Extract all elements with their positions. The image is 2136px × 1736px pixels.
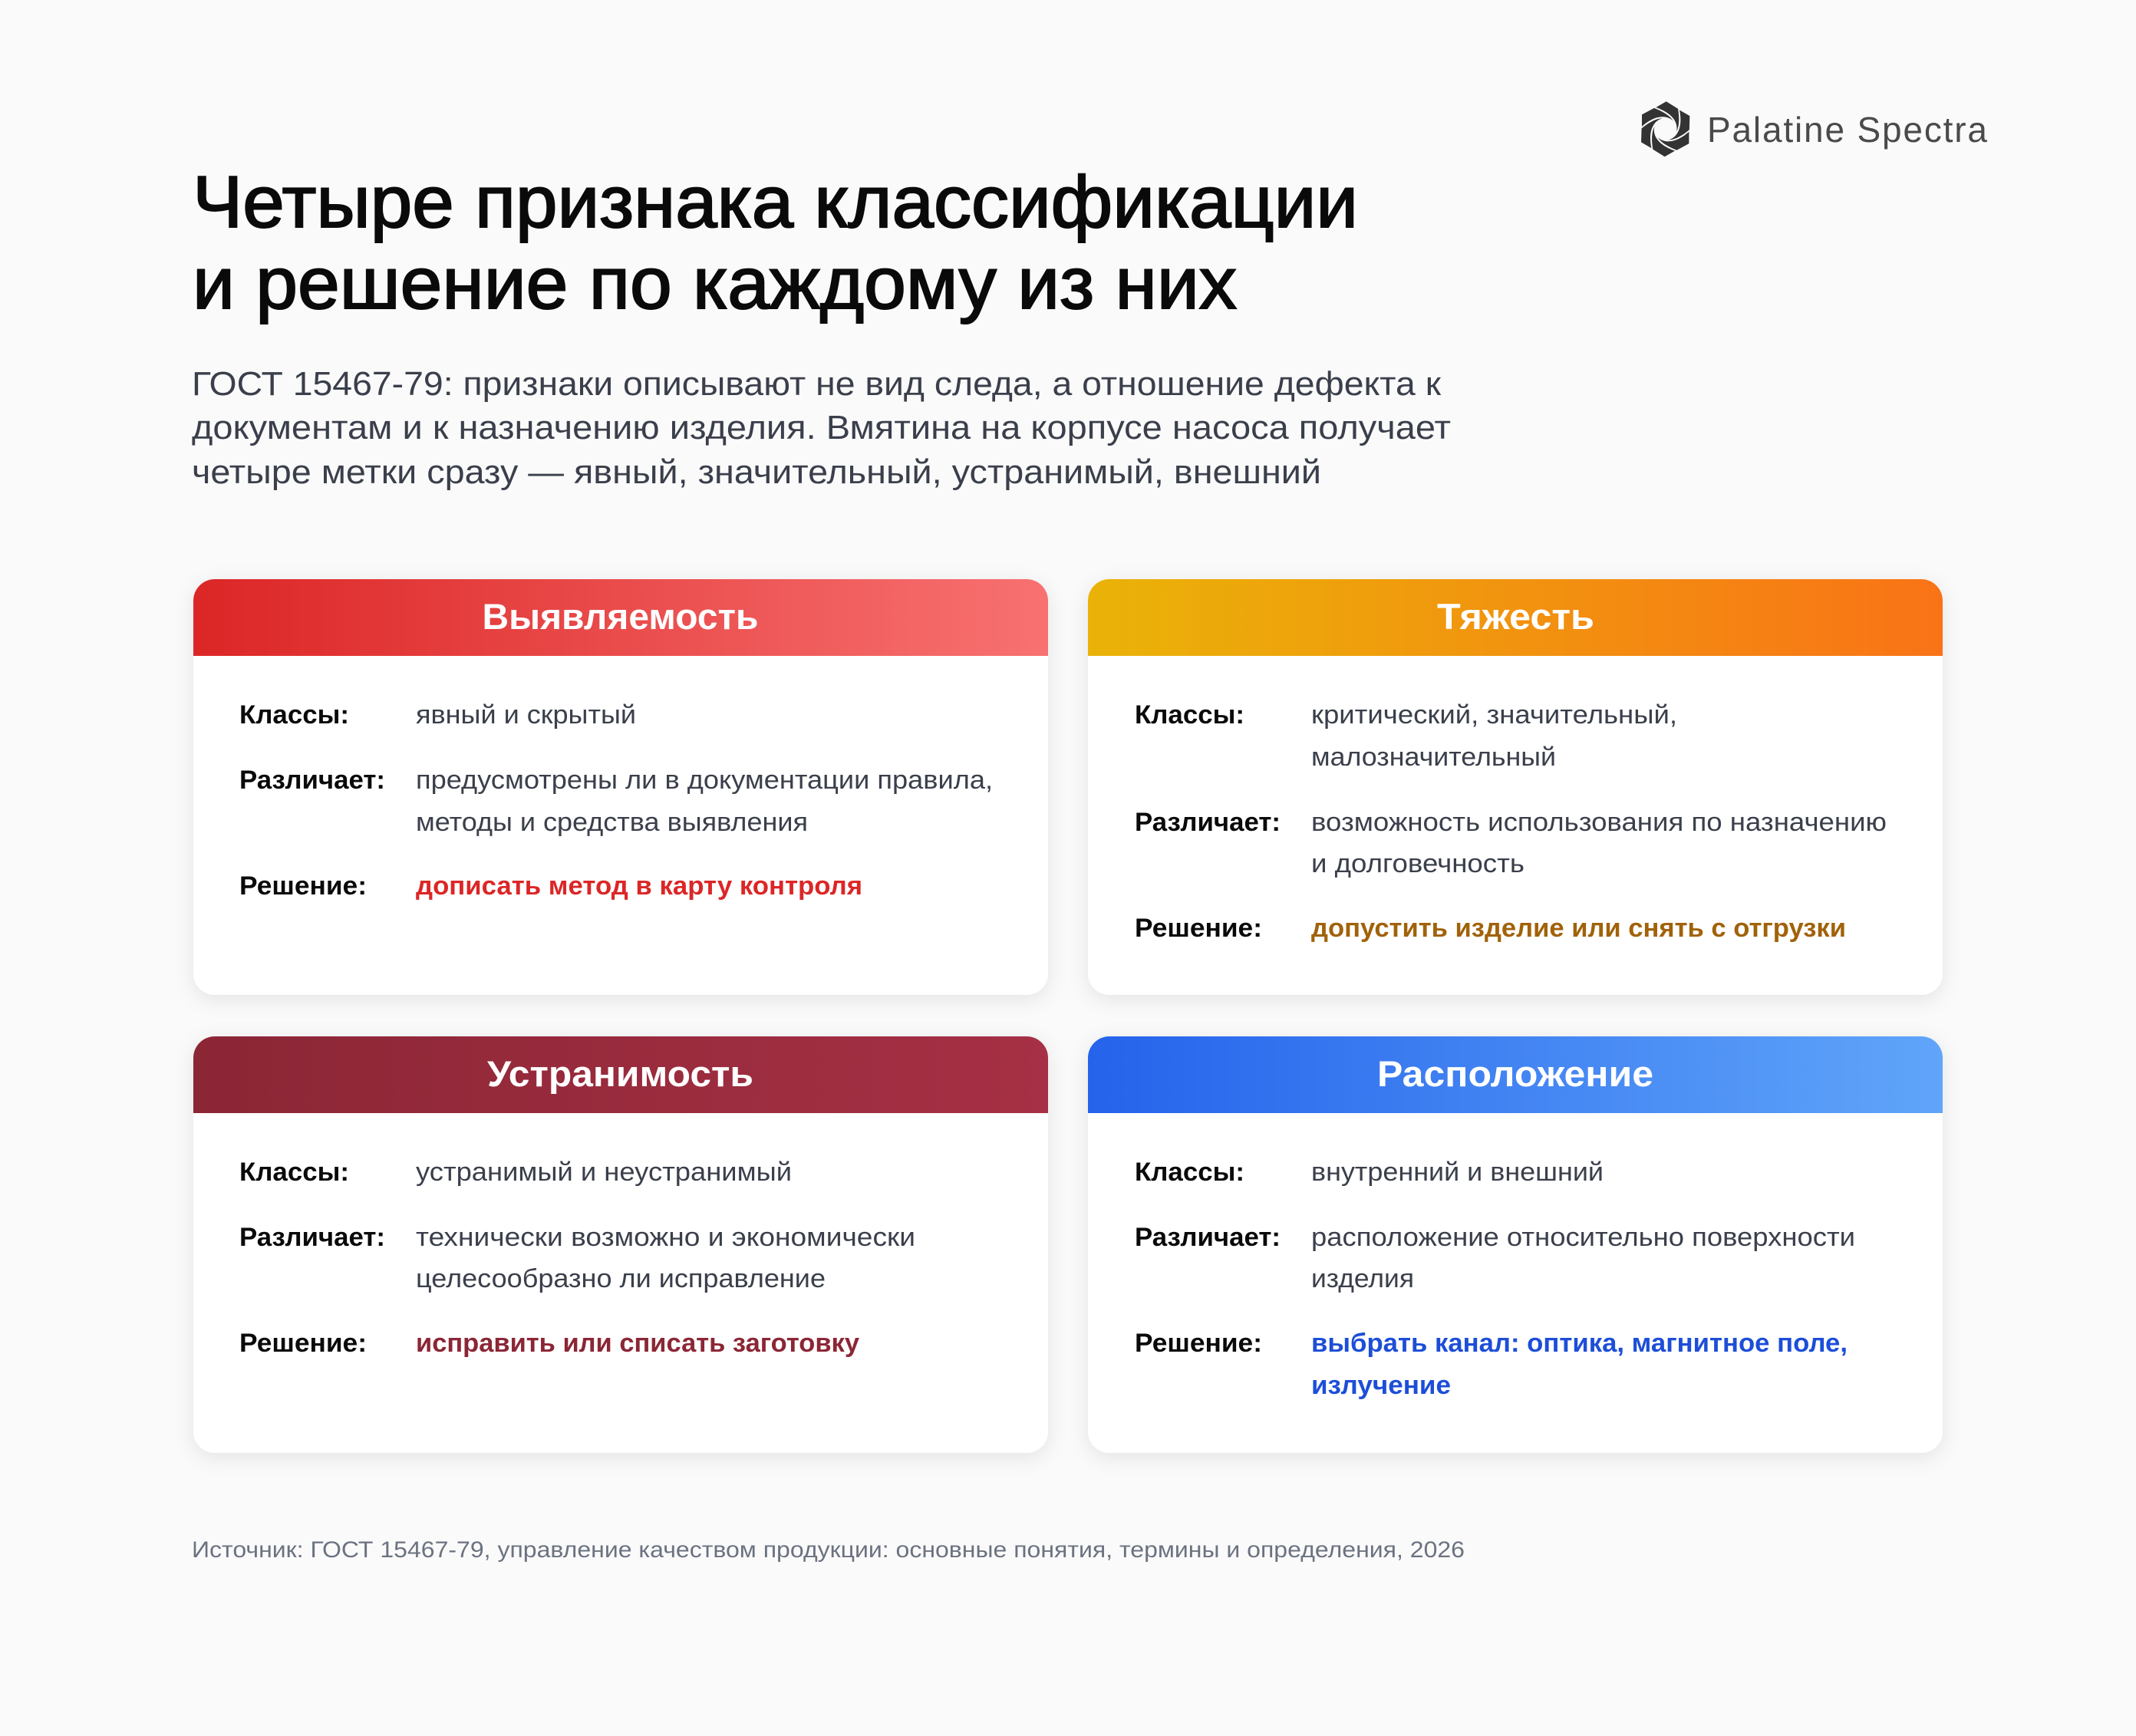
panel: Выявляемость <box>193 579 1048 995</box>
header: Выявляемость <box>193 579 1048 656</box>
subtitle text block: ГОСТ 15467-79: признаки описывают не вид следа, а отношение дефекта к <box>192 365 1442 403</box>
row: классы: Классы: <box>239 700 349 730</box>
row: различает: Различает: <box>1135 808 1281 837</box>
row: различает: предусмотрены ли в документации правила, <box>416 766 993 795</box>
header: Выявляемость: Выявляемость <box>482 596 758 637</box>
row: решение: дописать метод в карту контроля <box>416 871 862 901</box>
title: Четыре признака классификации <box>193 161 1358 243</box>
row: классы: Классы: <box>1135 1158 1244 1187</box>
row: классы <box>239 700 636 730</box>
row: классы: критический, значительный, <box>1311 700 1677 730</box>
row: классы: устранимый и неустранимый <box>416 1158 792 1187</box>
row: классы: Классы: <box>1135 700 1244 730</box>
row: различает <box>1135 808 1887 878</box>
header: Устранимость: Устранимость <box>487 1053 753 1094</box>
row: различает <box>239 1223 915 1293</box>
panel: Тяжесть <box>1088 579 1943 995</box>
row: различает: Различает: <box>239 766 385 795</box>
footer source note: Источник: ГОСТ 15467-79, управление качеством продукции: основные понятия, термины и определения, 2026 <box>192 1537 1465 1563</box>
row: различает: Различает: <box>239 1223 385 1252</box>
row: различает <box>1135 1223 1855 1293</box>
header: Тяжесть: Тяжесть <box>1437 596 1594 637</box>
header: Тяжесть <box>1088 579 1943 656</box>
row: решение: Решение: <box>1135 914 1262 943</box>
row: решение: Решение: <box>239 871 367 901</box>
row: различает: Различает: <box>1135 1223 1281 1252</box>
row: различает: изделия <box>1311 1264 1414 1293</box>
row: классы: внутренний и внешний <box>1311 1158 1604 1187</box>
icon: swirl logo mark <box>1635 101 1696 156</box>
panel: Расположение <box>1088 1036 1943 1453</box>
subtitle text block <box>192 365 1451 491</box>
subtitle text block: документам и к назначению изделия. Вмятина на корпусе насоса получает <box>192 409 1451 446</box>
row: классы <box>1135 1158 1604 1187</box>
row: решение <box>1135 1329 1848 1400</box>
row: различает: расположение относительно поверхности <box>1311 1223 1855 1252</box>
row: решение: Решение: <box>239 1329 367 1358</box>
row: различает: технически возможно и экономически <box>416 1223 915 1252</box>
header: Расположение <box>1088 1036 1943 1113</box>
row: классы <box>1135 700 1677 772</box>
header: Расположение: Расположение <box>1377 1053 1653 1094</box>
row: различает: методы и средства выявления <box>416 808 808 837</box>
row: решение: выбрать канал: оптика, магнитное поле, <box>1311 1329 1848 1358</box>
row: различает: целесообразно ли исправление <box>416 1264 826 1293</box>
panel: Устранимость <box>193 1036 1048 1453</box>
title <box>193 161 1358 324</box>
logo wordmark: Palatine Spectra <box>1707 110 1987 150</box>
subtitle text block: четыре метки сразу — явный, значительный, устранимый, внешний <box>192 453 1321 491</box>
row: различает: возможность использования по назначению <box>1311 808 1887 837</box>
logo: Palatine Spectra <box>1635 101 1987 156</box>
row: классы: Классы: <box>239 1158 349 1187</box>
row: различает <box>239 766 993 837</box>
row: классы: явный и скрытый <box>416 700 636 730</box>
row: решение: допустить изделие или снять с отгрузки <box>1311 914 1846 943</box>
title: и решение по каждому из них <box>193 242 1237 324</box>
row: классы <box>239 1158 792 1187</box>
row: решение: исправить или списать заготовку <box>416 1329 859 1358</box>
header: Устранимость <box>193 1036 1048 1113</box>
row: классы: малозначительный <box>1311 743 1556 772</box>
row: решение: излучение <box>1311 1371 1451 1400</box>
row: решение: Решение: <box>1135 1329 1262 1358</box>
row: различает: и долговечность <box>1311 849 1525 878</box>
